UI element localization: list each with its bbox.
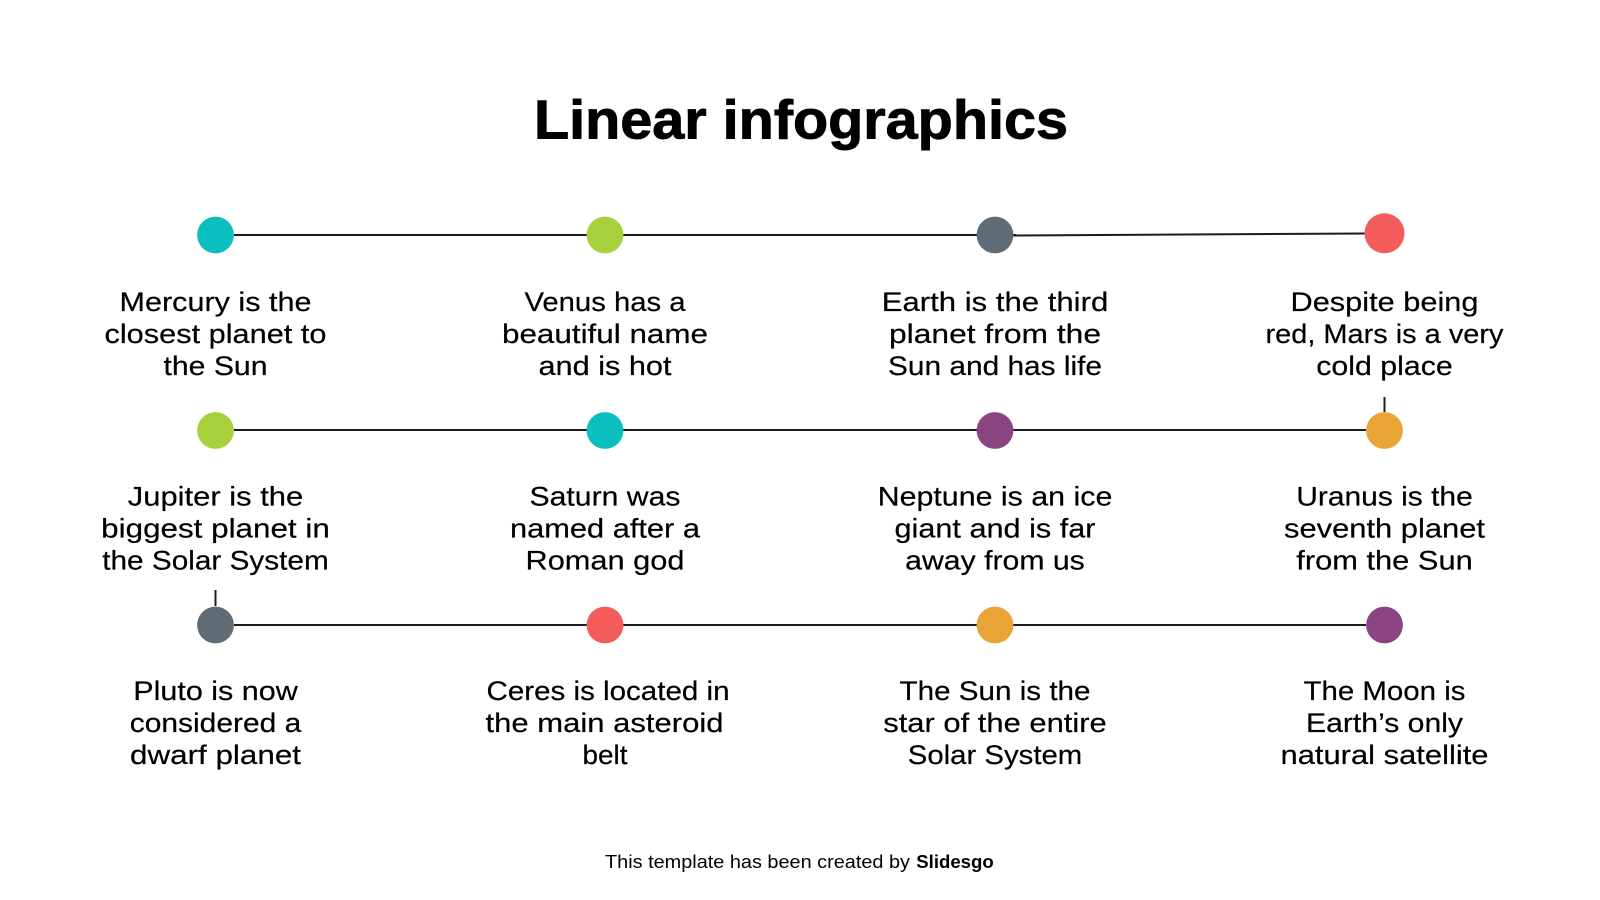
panel: Saturn: [510, 412, 700, 575]
text: Venus: Venus has a: [524, 287, 686, 317]
text: Jupiter: the Solar System: [102, 545, 329, 575]
panel: Mars: [1266, 213, 1504, 381]
text: Earth: Earth is the third: [882, 287, 1108, 317]
marker: Jupiter: [197, 412, 234, 449]
text: Ceres: Ceres is located in: [486, 676, 730, 706]
text: Jupiter: biggest planet in: [101, 513, 330, 543]
panel: Sun: [883, 607, 1107, 770]
text: Venus: beautiful name: [502, 319, 708, 349]
text: Jupiter: [101, 481, 330, 575]
text: Neptune: giant and is far: [894, 513, 1096, 543]
text: Moon: The Moon is: [1304, 676, 1466, 706]
marker: Earth: [977, 217, 1013, 253]
text: Pluto: [130, 676, 302, 770]
text: Moon: natural satellite: [1280, 740, 1488, 770]
panel: Venus: [502, 217, 708, 381]
marker: Moon: [1366, 607, 1403, 643]
marker: Venus: [587, 217, 623, 253]
panel: Jupiter: [101, 412, 330, 575]
text: Sun: The Sun is the: [900, 676, 1090, 706]
panel: Mercury: [104, 217, 326, 381]
text: Jupiter: Jupiter is the: [128, 481, 303, 511]
footer credit: Slidesgo: [916, 851, 994, 872]
marker: Mercury: [197, 217, 234, 253]
text: Neptune: [878, 481, 1112, 575]
text: Sun: Solar System: [908, 740, 1082, 770]
text: Moon: Earth’s only: [1306, 708, 1464, 738]
text: Pluto: considered a: [130, 708, 301, 738]
text: Mercury: [104, 287, 326, 381]
panel: Earth: [882, 217, 1108, 381]
text: Saturn: [510, 481, 700, 575]
text: Mercury: the Sun: [164, 351, 268, 381]
marker: Pluto: [197, 607, 234, 643]
timeline row 1 connector: [234, 234, 1366, 236]
text: Pluto: Pluto is now: [133, 676, 298, 706]
marker: Uranus: [1366, 412, 1403, 449]
timeline row 2 connector: [234, 397, 1384, 430]
marker: Sun: [977, 607, 1013, 643]
text: Mercury: Mercury is the: [120, 287, 312, 317]
text: Sun: star of the entire: [883, 708, 1107, 738]
text: Moon: [1280, 676, 1488, 770]
text: Mercury: closest planet to: [104, 319, 326, 349]
text: Ceres: belt: [582, 740, 628, 770]
timeline row 3 connector: [216, 590, 1366, 625]
text: Sun: [883, 676, 1107, 770]
text: Ceres: [486, 676, 730, 770]
text: Earth: [882, 287, 1108, 381]
marker: Mars: [1364, 213, 1404, 253]
text: Uranus: Uranus is the: [1296, 481, 1473, 511]
title: Linear infographics: [534, 88, 1068, 150]
text: Mars: red, Mars is a very: [1266, 319, 1504, 349]
text: Mars: Despite being: [1290, 287, 1478, 317]
text: Neptune: Neptune is an ice: [878, 481, 1112, 511]
panel: Moon: [1280, 607, 1488, 770]
text: Uranus: from the Sun: [1296, 545, 1473, 575]
panel: Ceres: [486, 607, 730, 770]
text: Earth: planet from the: [889, 319, 1101, 349]
footer credit: This template has been created by: [605, 851, 911, 872]
text: Saturn: named after a: [510, 513, 700, 543]
text: Neptune: away from us: [905, 545, 1085, 575]
text: Earth: Sun and has life: [888, 351, 1102, 381]
text: Venus: and is hot: [538, 351, 672, 381]
marker: Saturn: [587, 412, 623, 449]
text: Pluto: dwarf planet: [130, 740, 302, 770]
panel: Pluto: [130, 607, 302, 770]
text: Saturn: Roman god: [526, 545, 684, 575]
text: Mars: cold place: [1316, 351, 1453, 381]
text: Venus: [502, 287, 708, 381]
text: Mars: [1266, 287, 1504, 381]
text: Ceres: the main asteroid: [486, 708, 724, 738]
panel: Uranus: [1284, 412, 1486, 575]
panel: Neptune: [878, 412, 1112, 575]
text: Saturn: Saturn was: [530, 481, 680, 511]
text: Uranus: seventh planet: [1284, 513, 1486, 543]
marker: Neptune: [977, 412, 1013, 449]
text: Uranus: [1284, 481, 1486, 575]
marker: Ceres: [587, 607, 623, 643]
